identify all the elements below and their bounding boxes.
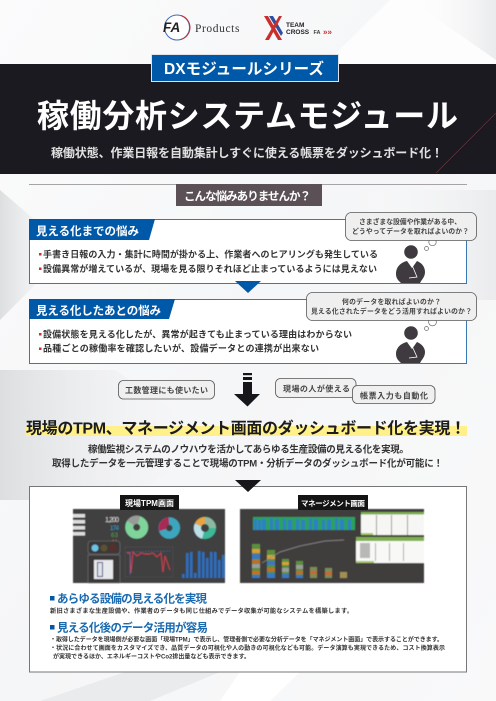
panel: worries before visualisation [29, 219, 466, 284]
feature: easy data use: が実現できるほか、エネルギーコストやCo2排出量なども表示できます。 [53, 652, 250, 660]
logo: Team Cross FA: FA [314, 30, 321, 36]
arrow: black triangle [235, 480, 261, 492]
icon: worried person 2 [396, 326, 425, 363]
tag: usable on site [276, 378, 356, 398]
panel: worries after visualisation: 見える化したあとの悩み [36, 304, 162, 318]
feature: visualise all equipment: 新旧さまざまな生産設備や、作業者のデータも同じ仕組みでデータ収集が可能なシステムを構築します。 [50, 607, 353, 615]
callout: worry bubble 1 [346, 212, 476, 250]
header band [0, 64, 496, 174]
panel: worries after visualisation [29, 299, 466, 364]
panel: worries after visualisation: 品種ごとの稼働率を確認したいが、設備データとの連携が出来ない [43, 342, 319, 354]
panel: worries before visualisation: 手書き日報の入力・集計に時間が掛かる上、作業者へのヒアリングも発生している [43, 248, 378, 260]
tag: automated reports: 帳票入力も自動化 [360, 390, 428, 400]
chart: donut multi [197, 520, 212, 536]
chart: line [125, 547, 173, 577]
arrow: black down [234, 373, 260, 406]
chart: top bars [253, 517, 355, 530]
panel: worries before visualisation: 設備異常が増えているが、現場を見る限りそれほど止まっているようには見えない [43, 263, 377, 274]
logo: Team Cross FA: CROSS [286, 29, 310, 36]
table: summary bottom [356, 537, 424, 563]
icon: worried person 1 [396, 245, 425, 283]
main heading with highlight: 現場のTPM、マネージメント画面のダッシュボード化を実現！ [26, 418, 466, 438]
panel: solution [30, 486, 466, 672]
callout: worry bubble 1: どうやってデータを取ればよいのか？ [352, 226, 469, 236]
screen: field TPM dashboard: 63 [111, 533, 119, 539]
callout: worry bubble 2 [306, 292, 476, 330]
question heading [176, 184, 322, 206]
table: summary top [361, 512, 424, 535]
intro paragraph: 稼働監視システムのノウハウを活かしてあらゆる生産設備の見える化を実現。 [88, 444, 409, 456]
subtitle: 稼働状態、作業日報を自動集計しすぐに使える帳票をダッシュボード化！ [51, 145, 443, 160]
label: field TPM screen [120, 495, 179, 510]
tag: man-hour management: 工数管理にも使いたい [125, 385, 208, 395]
arrow: blue down [235, 281, 261, 293]
section rule [29, 184, 467, 186]
panel: worries after visualisation: 設備状態を見える化したが、異常が起きても止まっている理由はわからない [43, 328, 352, 340]
logo: FA Products: FA [163, 20, 180, 35]
feature: easy data use: 見える化後のデータ活用が容易 [57, 620, 208, 634]
label: management screen: マネージメント画面 [301, 499, 366, 508]
tag: man-hour management [118, 380, 214, 399]
feature: easy data use: ・取得したデータを現場側が必要な画面「現場TPM」で表示し、管理者側で必要な分析データを「マネジメント画面」で表示することができます。 [50, 636, 443, 644]
logo: Team Cross FA: TEAM [286, 22, 304, 29]
logo: FA Products: Products [195, 23, 240, 35]
label: field TPM screen: 現場TPM画面 [125, 498, 174, 508]
callout: worry bubble 2: 見える化されたデータをどう活用すればよいのか？ [311, 306, 472, 316]
logo: Team Cross FA: »» [323, 28, 332, 36]
panel: worries before visualisation: 見える化までの悩み [36, 224, 140, 238]
logo: FA Products [163, 15, 240, 40]
label: management screen [298, 495, 368, 510]
chart: cumulative line [262, 540, 344, 563]
screen: field TPM dashboard: 1,200 [105, 517, 119, 524]
screen: field TPM dashboard [73, 509, 225, 583]
title: 稼働分析システムモジュール [37, 98, 458, 134]
intro paragraph: 取得したデータを一元管理することで現場のTPM・分析データのダッシュボード化が可能に！ [52, 458, 443, 470]
feature: visualise all equipment: あらゆる設備の見える化を実現 [57, 592, 208, 606]
feature: visualise all equipment [50, 592, 353, 615]
logo: Team Cross FA [264, 16, 332, 40]
chart: donut green [129, 520, 144, 535]
feature: easy data use: ・状況に合わせて画面をカスタマイズでき、品質データの可視化や人の動きの可視化なども可能。データ演算も実現できるため、コスト換算表示 [50, 644, 445, 652]
chart: stacked bars [252, 544, 347, 578]
tag: automated reports [352, 386, 435, 404]
intro paragraph [52, 444, 443, 470]
callout: worry bubble 2: 何のデータを取ればよいのか？ [342, 297, 441, 306]
series tag: DXモジュールシリーズ [164, 59, 324, 78]
question heading: こんな悩みありませんか？ [184, 189, 311, 203]
series tag [152, 54, 338, 82]
screen: field TPM dashboard: 41 [111, 540, 119, 546]
chart: blue bars [182, 551, 224, 578]
feature: easy data use [50, 620, 445, 660]
chart: donut teal [162, 521, 176, 535]
screen: field TPM dashboard: 174 [110, 526, 120, 532]
tag: usable on site: 現場の人が使える [283, 384, 350, 394]
callout: worry bubble 1: さまざまな設備や作業がある中、 [359, 217, 461, 226]
screen: management dashboard [240, 509, 424, 583]
